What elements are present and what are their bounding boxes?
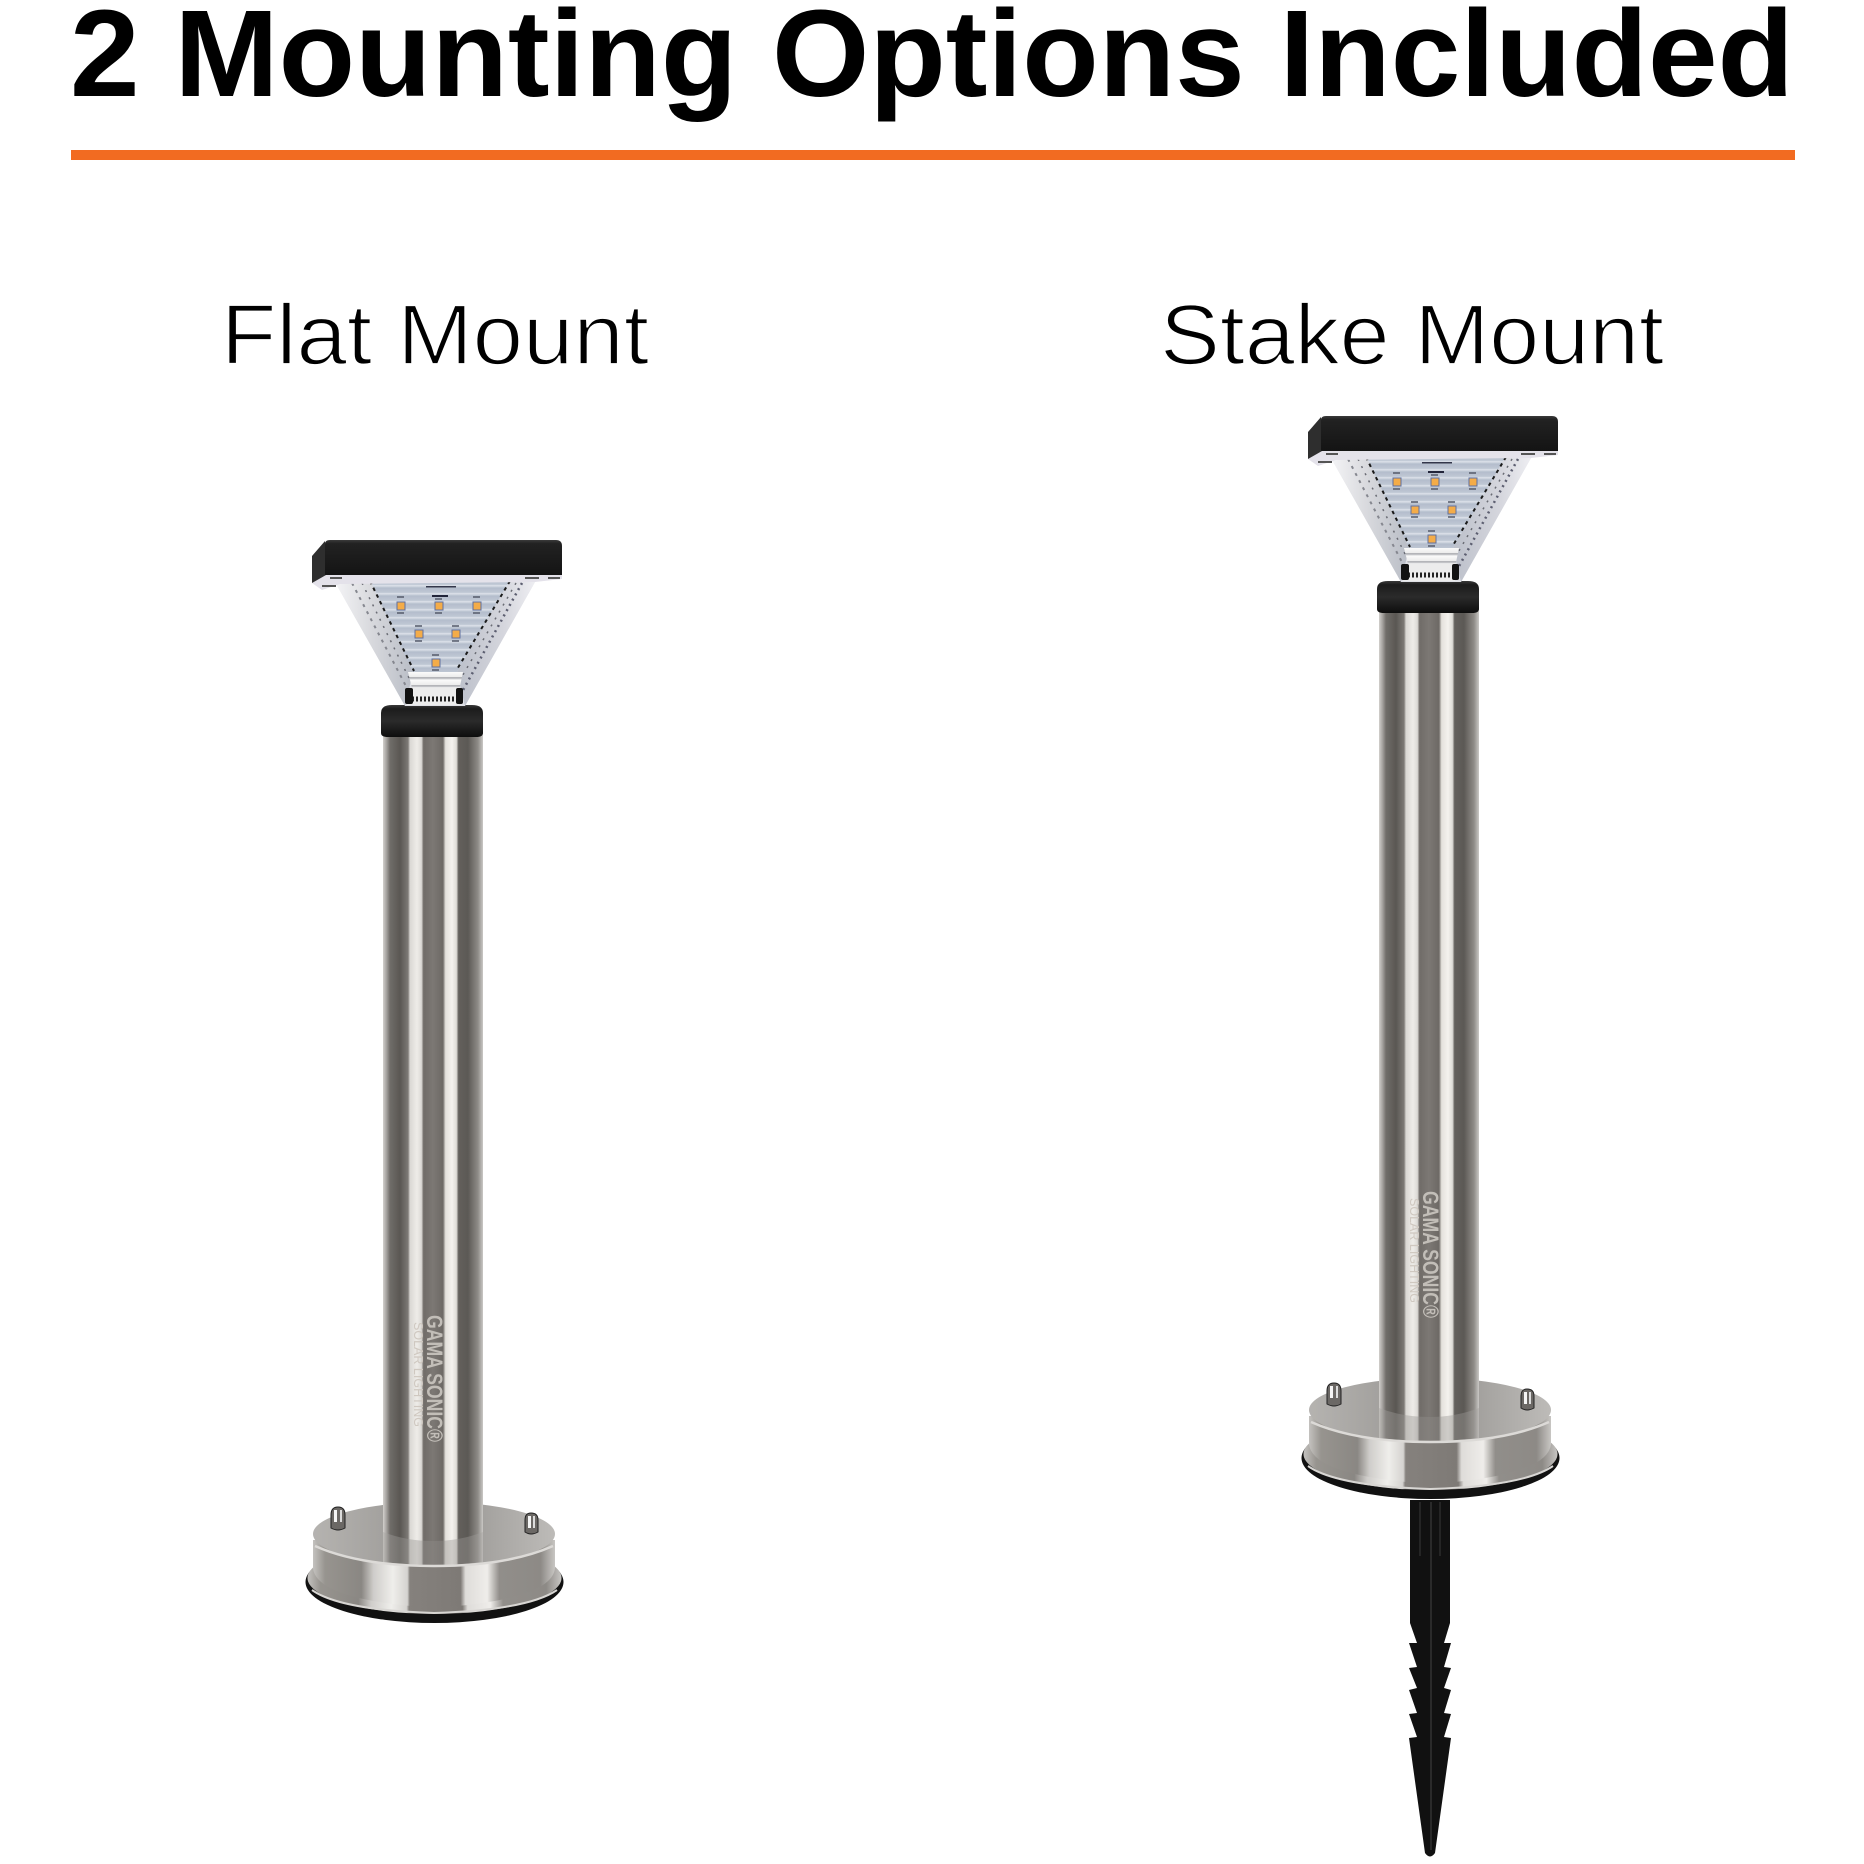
brand engraving: SOLAR LIGHTING (1407, 1198, 1422, 1303)
solar panel cap (312, 540, 562, 590)
base (306, 1502, 564, 1623)
ground stake (1409, 1500, 1451, 1856)
brand engraving: SOLAR LIGHTING (411, 1322, 426, 1427)
orange divider bar (71, 150, 1795, 160)
lens housing (335, 580, 535, 706)
tube (383, 735, 483, 1541)
heading: stake mount: Stake Mount (1160, 288, 1664, 383)
lens housing (1331, 456, 1531, 582)
bolts (1327, 1383, 1534, 1410)
stake mount solar light (1302, 416, 1560, 1856)
LEDs (397, 581, 481, 670)
bolts (331, 1507, 538, 1534)
collar (1377, 581, 1479, 613)
LEDs (1393, 457, 1477, 546)
brand engraving: GAMA SONIC® (422, 1315, 447, 1442)
solar panel cap (1308, 416, 1558, 466)
brand engraving (1407, 1191, 1443, 1318)
brand engraving: GAMA SONIC® (1418, 1191, 1443, 1318)
brand engraving (411, 1315, 447, 1442)
heading: flat mount: Flat Mount (221, 288, 649, 383)
collar (381, 705, 483, 737)
flat mount solar light (306, 540, 564, 1623)
base (1302, 1378, 1560, 1499)
tube (1379, 611, 1479, 1417)
